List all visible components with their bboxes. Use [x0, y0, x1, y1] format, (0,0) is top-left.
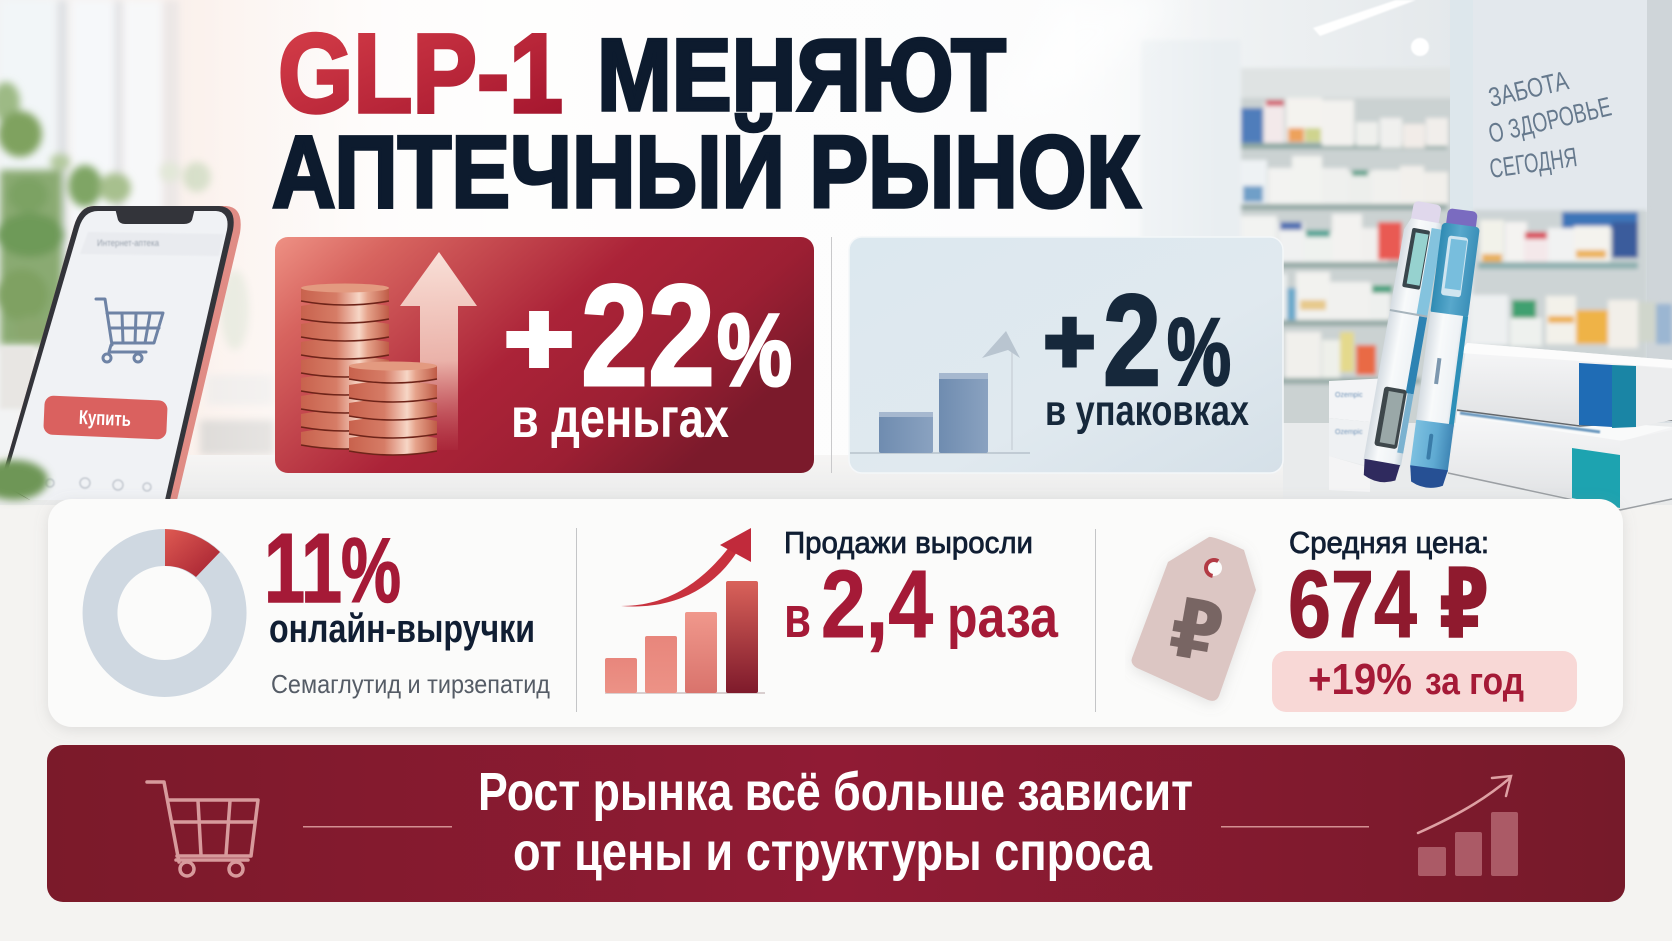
icon: arrow up [400, 252, 477, 450]
plant [0, 82, 249, 350]
value 11%: 11 [264, 513, 342, 623]
shelf row 1 [1241, 108, 1263, 143]
pharmacy wall [1141, 40, 1456, 470]
panel: +22% in money [275, 237, 814, 473]
sales growth label: Продажи выросли [784, 525, 1033, 560]
title fade [180, 0, 1220, 500]
sign panel [1450, 0, 1672, 360]
boxes [1329, 343, 1672, 511]
sign text [1486, 65, 1614, 184]
title: АПТЕЧНЫЙ РЫНОК [272, 114, 1141, 229]
sign text: О ЗДОРОВЬЕ [1486, 91, 1614, 149]
title: GLP-1 [278, 11, 563, 136]
title: МЕНЯЮТ [597, 18, 1006, 132]
donut chart 11% [83, 529, 247, 697]
phone with shopping app [0, 206, 241, 500]
icon: price tag [1132, 537, 1256, 701]
shelf row 2 [1241, 160, 1267, 204]
boxes: Ozempic [1335, 429, 1363, 436]
value +2%: + [1044, 292, 1095, 392]
value +2%: % [1167, 299, 1231, 406]
icon: cart outline [147, 782, 258, 876]
counter [0, 455, 1672, 505]
value 2,4 times [784, 551, 1059, 658]
buy button: Купить [78, 407, 131, 431]
note: Семаглутид и тирзепатид [271, 669, 550, 699]
sign text: ЗАБОТА [1486, 65, 1571, 113]
sign text: СЕГОДНЯ [1488, 142, 1579, 184]
icon: cart on phone [96, 299, 163, 362]
injection pens and boxes [1329, 200, 1672, 511]
value 2,4 times: раза [947, 585, 1059, 650]
badge +19% per year [1272, 651, 1577, 712]
window light, left [0, 0, 179, 340]
conclusion text: Рост рынка всё больше зависит [478, 762, 1193, 822]
value +22%: 22 [581, 255, 715, 416]
ceiling lights [1313, 0, 1429, 56]
label: в упаковках [1045, 387, 1249, 435]
value +22%: % [717, 293, 792, 407]
panel: +2% in packs [849, 237, 1283, 473]
value +2% [1044, 267, 1231, 413]
value 674 rub: ₽ [1439, 551, 1489, 658]
buy button [43, 395, 168, 440]
label online revenue: онлайн-выручки [269, 607, 535, 651]
conclusion text: от цены и структуры спроса [513, 822, 1153, 882]
value +22%: + [505, 283, 573, 395]
conclusion text [478, 762, 1193, 882]
shelf row 4 [1241, 274, 1287, 320]
value 674 rub: 674 [1288, 551, 1417, 658]
label: в деньгах [511, 386, 729, 449]
value 2,4 times: 2,4 [821, 551, 933, 658]
chart: rising bars [605, 528, 765, 694]
badge +19% per year: +19% [1308, 655, 1412, 704]
pen 2 [1408, 208, 1482, 490]
icon: coin stacks [301, 284, 437, 455]
icon: rising bars [1418, 776, 1518, 876]
lower box [1448, 412, 1672, 508]
value 2,4 times: в [784, 585, 811, 650]
shelf row 5 [1285, 332, 1321, 378]
icon: bars with faint arrow [850, 331, 1030, 454]
icon: price tag: ₽ [1163, 582, 1230, 681]
panel: metrics band [48, 499, 1623, 727]
shelf row 3 [1241, 216, 1277, 262]
panel: conclusion banner [47, 745, 1625, 902]
value +22% [505, 255, 792, 416]
phone header text: Интернет-аптека [97, 238, 159, 248]
value +2%: 2 [1103, 267, 1161, 413]
upper box [1457, 343, 1672, 425]
value 11%: % [341, 520, 401, 622]
right shelves [1470, 210, 1672, 370]
average price label: Средняя цена: [1289, 525, 1489, 560]
title [272, 11, 1141, 229]
badge +19% per year: за год [1425, 661, 1524, 703]
pen 1 [1360, 200, 1447, 485]
boxes: Ozempic [1335, 392, 1363, 399]
